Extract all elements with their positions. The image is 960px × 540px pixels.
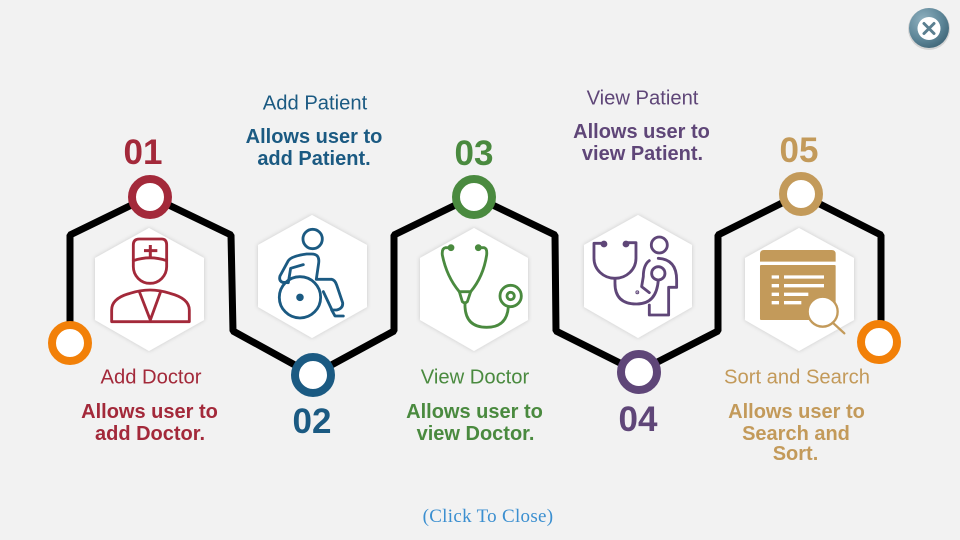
description: Sort and Search: Allows user to <box>728 401 865 423</box>
number 05: 05 <box>780 131 818 170</box>
hexagon 01 <box>95 228 204 351</box>
description: Add Doctor: Allows user to <box>81 401 218 423</box>
description: View Patient: view Patient. <box>582 143 703 165</box>
title: View Doctor: View Doctor <box>421 366 530 388</box>
hexagon 05 <box>745 228 854 351</box>
icon: stethoscope <box>442 246 521 327</box>
title: Sort and Search: Sort and Search <box>724 366 870 388</box>
number 01: 01 <box>124 133 162 172</box>
step 01: Add Doctor <box>81 133 218 445</box>
description: Add Doctor: add Doctor. <box>95 423 205 445</box>
description: View Patient: Allows user to <box>573 121 710 143</box>
node 02 <box>295 357 331 393</box>
node 03 <box>456 179 492 215</box>
icon: list with magnifier <box>760 250 844 333</box>
number 03: 03 <box>455 134 493 173</box>
connector line <box>70 194 881 375</box>
description: View Doctor: Allows user to <box>406 401 543 423</box>
hexagon 04 <box>584 215 692 338</box>
description: Sort and Search: Search and <box>742 423 850 445</box>
number 02: 02 <box>293 402 331 441</box>
title: Add Doctor: Add Doctor <box>100 366 202 388</box>
node 05 <box>783 176 819 212</box>
icon: doctor <box>112 239 189 322</box>
description: View Doctor: view Doctor. <box>417 423 534 445</box>
description: Add Patient: add Patient. <box>257 148 371 170</box>
icon: stethoscope and patient <box>594 237 677 315</box>
step 04: View Patient <box>573 88 710 439</box>
description: Add Patient: Allows user to <box>246 126 382 148</box>
number 04: 04 <box>619 400 658 439</box>
close button icon <box>908 8 950 50</box>
node 01 <box>132 179 168 215</box>
hexagon 02 <box>258 215 367 338</box>
icon: wheelchair <box>279 229 343 318</box>
node: start <box>52 325 88 361</box>
title: Add Patient: Add Patient <box>263 92 368 114</box>
description: Sort and Search: Sort. <box>773 443 818 465</box>
step 02: Add Patient <box>246 92 382 441</box>
step 05: Sort and Search <box>724 131 870 465</box>
click to close link: (Click To Close) <box>423 506 553 527</box>
hexagon 03 <box>420 228 528 351</box>
title: View Patient: View Patient <box>587 88 699 110</box>
node: end <box>861 324 897 360</box>
step 03: View Doctor <box>406 134 543 445</box>
node 04 <box>621 354 657 390</box>
